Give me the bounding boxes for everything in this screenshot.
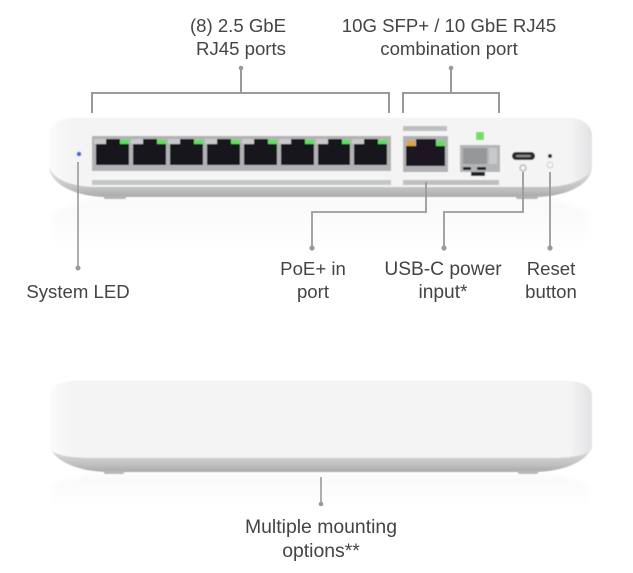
callout line: mounting	[319, 477, 323, 506]
port 4	[205, 139, 240, 165]
port 7	[316, 139, 350, 165]
port 2	[131, 139, 166, 165]
device reflection	[52, 199, 590, 250]
device face	[49, 118, 592, 187]
label: USB-C power input: USB-C power	[384, 259, 502, 280]
label: 2.5 GbE ports: RJ45 ports	[196, 38, 286, 59]
SFP+ port	[460, 132, 500, 176]
2.5 GbE RJ45 port block	[92, 136, 391, 171]
port 1	[94, 139, 129, 165]
label: mounting options: Multiple mounting	[245, 516, 397, 538]
port 6	[279, 139, 314, 165]
label: combination port: 10G SFP+ / 10 GbE RJ45	[342, 15, 556, 36]
system LED	[77, 152, 81, 156]
label: USB-C power input: input*	[418, 282, 468, 303]
label: System LED: System LED	[26, 281, 130, 302]
rear underside	[50, 446, 592, 474]
label: combination port: combination port	[380, 38, 519, 59]
port 5	[242, 139, 277, 165]
callout line: PoE+ in port	[309, 182, 426, 251]
rear reflection	[52, 474, 590, 510]
bottom device: rear view	[50, 381, 592, 510]
port label strip	[92, 180, 391, 185]
top device: front view of switch	[49, 118, 592, 250]
PoE+ in port	[403, 126, 448, 172]
device underside	[49, 168, 592, 199]
callout line: Reset button	[547, 172, 553, 251]
callout line: System LED	[76, 162, 80, 270]
combo label strip	[403, 180, 499, 185]
label: mounting options: options**	[282, 540, 360, 562]
port 3	[168, 139, 203, 165]
label: 2.5 GbE ports: (8) 2.5 GbE	[190, 15, 286, 36]
label: PoE+ in port: PoE+ in	[280, 258, 346, 279]
port 8	[352, 139, 387, 165]
callout bracket: combination port	[403, 66, 499, 113]
reset button	[547, 154, 553, 168]
label: PoE+ in port: port	[297, 281, 330, 302]
callout line: USB-C power input	[441, 172, 523, 251]
USB-C port	[512, 152, 535, 171]
label: Reset button: Reset	[527, 258, 576, 279]
rear face	[50, 381, 592, 458]
callout bracket: 2.5 GbE ports	[92, 66, 389, 113]
label: Reset button: button	[525, 281, 577, 302]
